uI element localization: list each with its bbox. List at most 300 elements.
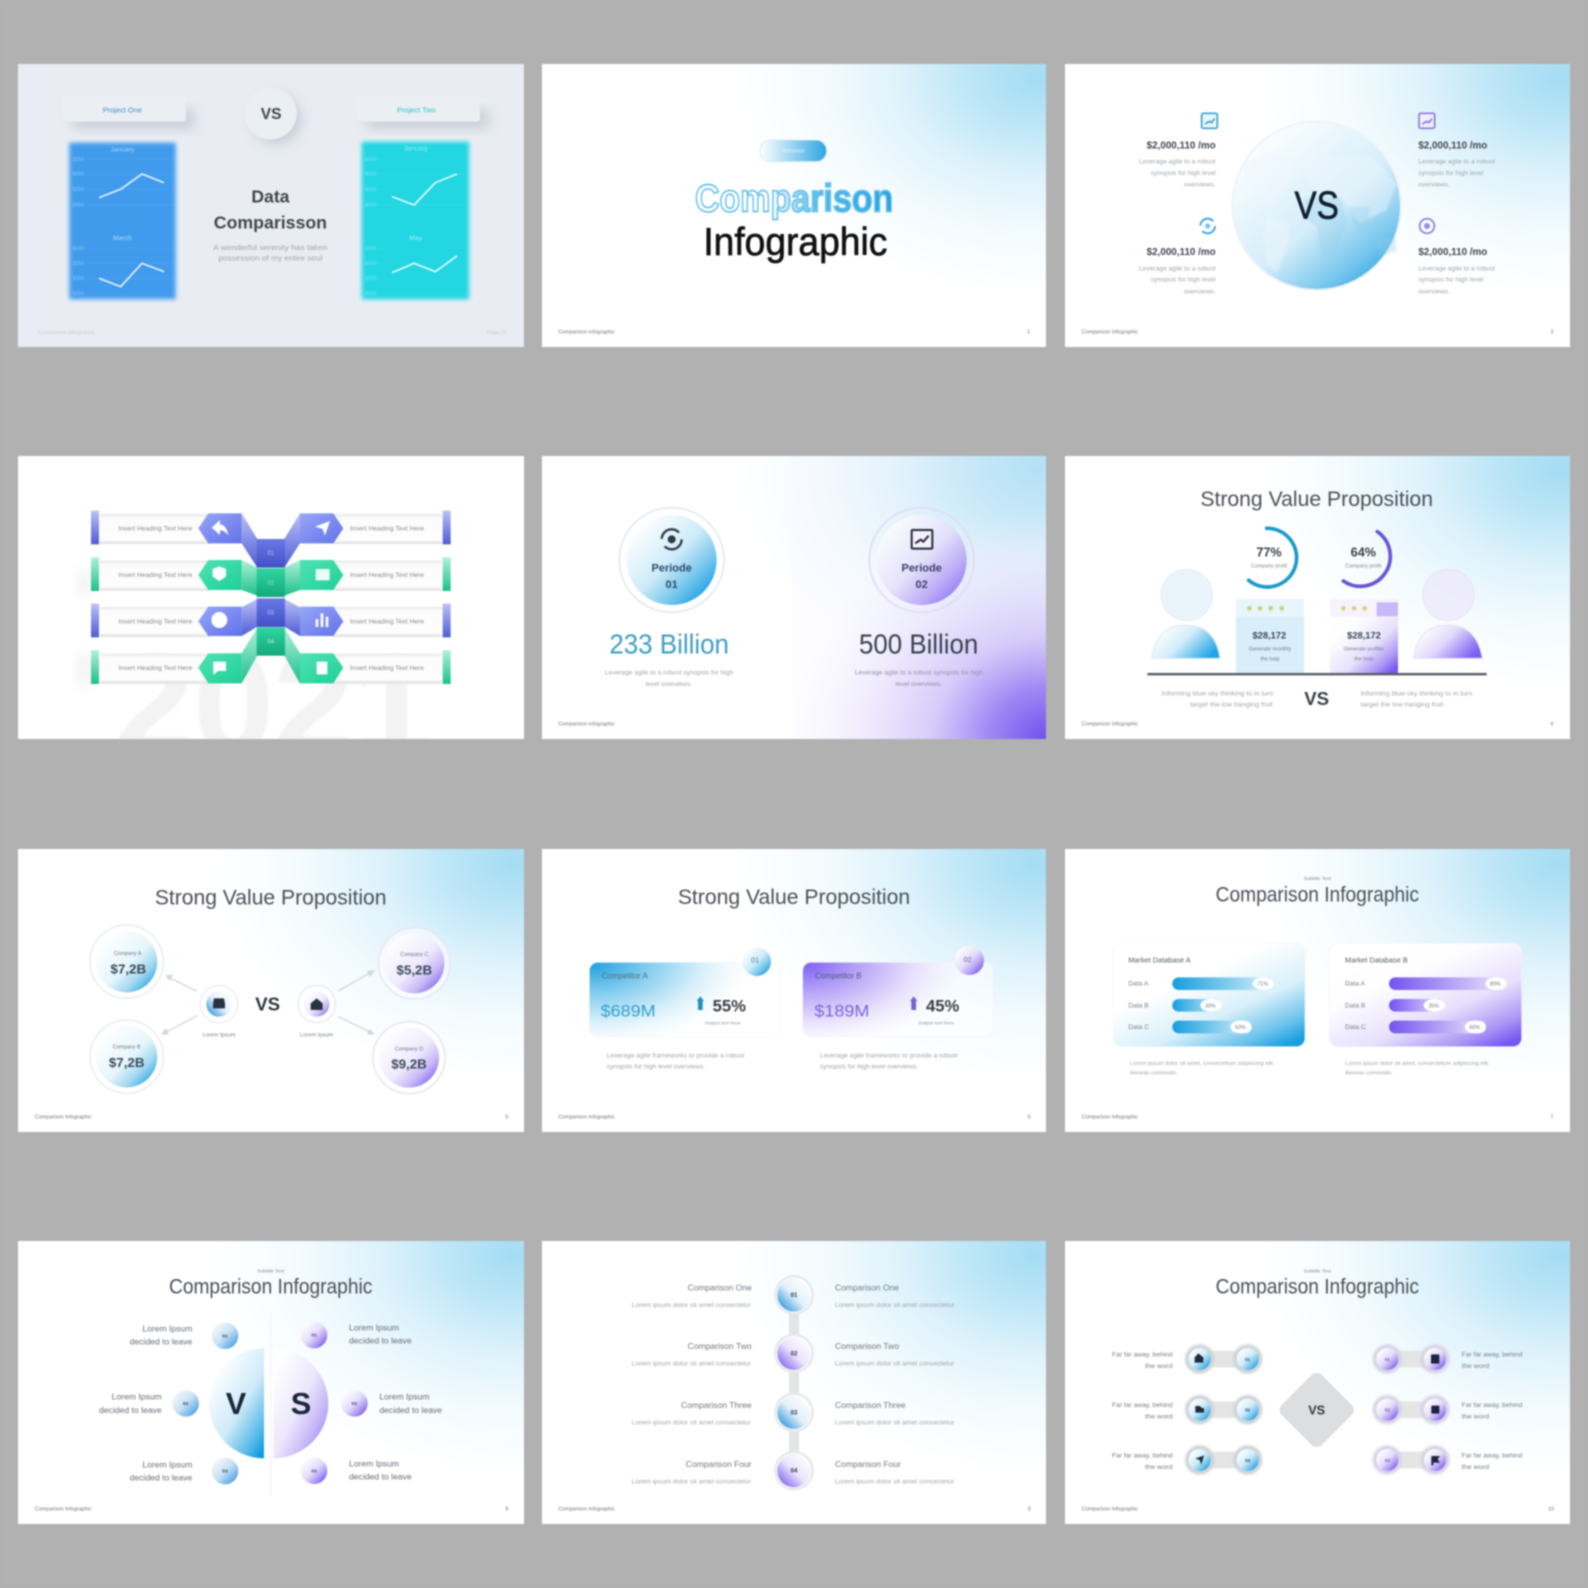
- watermark: 2021: 2021: [114, 624, 433, 784]
- footer: Comparison Infographic: [558, 722, 615, 728]
- person: left: [1152, 569, 1220, 658]
- badge: 01: [742, 947, 771, 976]
- description right: Leverage agile to a robust synopsis for high: [855, 670, 984, 677]
- row panels: [100, 514, 442, 684]
- ring: 77 percent: Company profit: [1251, 563, 1288, 569]
- vs: VS: [255, 994, 280, 1015]
- footer: [558, 1114, 1031, 1120]
- description left: [605, 670, 734, 688]
- chart panel: project two: $000: [365, 276, 376, 282]
- chart panel: project two: May: [409, 235, 423, 242]
- ring: 64 percent: Company profit: [1345, 563, 1382, 569]
- heading: data comparisson: [214, 187, 327, 232]
- slide 3: globe vs: [1065, 64, 1570, 347]
- half circle: v: [209, 1348, 264, 1458]
- footer: Comparison Infographic: [35, 1114, 92, 1120]
- chart panel: project one: $000: [73, 172, 84, 178]
- line chart: january: [99, 174, 164, 198]
- stat: top left: $2,000,110 /mo: [1147, 140, 1216, 151]
- bar: data b: 35%: [1428, 1003, 1439, 1009]
- badge: 01: 01: [751, 955, 759, 964]
- circle: company d: Company D: [395, 1046, 423, 1052]
- chart panel: project two: $000: [365, 203, 376, 209]
- labels right: Lorem Ipsum: [349, 1324, 399, 1333]
- labels right: Far far away, behind: [1462, 1403, 1522, 1409]
- stat: bottom right: [1418, 247, 1495, 295]
- caption right: Informing blue-sky thinking to in turn: [1361, 690, 1473, 697]
- row labels: Insert Heading Text Here: [350, 526, 424, 533]
- title: Strong Value Proposition: [155, 885, 386, 909]
- badges left: 03: [222, 1469, 228, 1475]
- icon: chart left: [1202, 113, 1217, 128]
- footer: [1082, 1506, 1554, 1512]
- footer: Comparison Infographic: [35, 1506, 92, 1512]
- labels right: Far far away, behind: [1462, 1352, 1522, 1358]
- card: database b: Data B: [1345, 1002, 1366, 1009]
- subtitle: Subtitle Text: [1304, 876, 1331, 882]
- chart panel: project one: $000: [73, 246, 84, 252]
- title: Comparison Infographic: [169, 1275, 373, 1299]
- caption left: Informing blue-sky thinking to in turn: [1162, 690, 1274, 697]
- labels left: the word: [1145, 1465, 1173, 1471]
- circle: periode 01: Periode: [652, 562, 692, 574]
- labels left: the word: [1145, 1415, 1173, 1421]
- chart panel: project two: $000: [365, 172, 376, 178]
- chart panel: project two: $000: [365, 246, 376, 252]
- slide 10: v and s: [18, 1241, 524, 1524]
- circle: periode 02: Periode: [902, 562, 942, 574]
- icon: line chart: [912, 530, 932, 549]
- card: competitor b: $189M: [814, 1002, 869, 1021]
- baseline: [1147, 673, 1487, 675]
- card: database b: [1329, 943, 1522, 1047]
- labels right: [1462, 1352, 1522, 1471]
- slide 6: people comparison: [1065, 456, 1570, 739]
- description left: Leverage agile to a robust synopsis for high: [605, 670, 734, 677]
- price card: right: the loop: [1355, 656, 1374, 662]
- stat: top right: synopsis for high level: [1418, 170, 1484, 177]
- bar: data a: [1389, 977, 1507, 990]
- icon: chart right: [1419, 113, 1435, 128]
- person: right: [1413, 569, 1482, 658]
- circle: company b: Company B: [113, 1044, 141, 1050]
- labels left: Far far away, behind: [1112, 1352, 1173, 1358]
- labels left: Lorem ipsum dolor sit amet consectetur: [632, 1303, 751, 1309]
- line chart: may: [392, 256, 457, 273]
- stat: top right: overviews.: [1418, 182, 1450, 189]
- slide 9: market database: [1065, 849, 1570, 1132]
- card: database b: Market Database B: [1345, 955, 1408, 964]
- circle: periode 02: [869, 508, 974, 612]
- description left: [607, 1052, 745, 1071]
- price card: left: Generate monthly: [1249, 647, 1292, 653]
- dumbbell row 2 left: 02: [1245, 1408, 1251, 1413]
- labels left: Lorem Ipsum: [112, 1393, 162, 1402]
- dumbbell row 1 left: 01: [1245, 1357, 1251, 1362]
- chart panel: project two: $000: [365, 261, 376, 267]
- chart panel: project two: $000: [365, 157, 376, 163]
- stat: top left: overviews.: [1184, 182, 1216, 189]
- chart panel: project two: $000: [365, 291, 376, 297]
- node 04: [775, 1452, 813, 1489]
- footer: 1: [1027, 329, 1030, 335]
- description: A wonderful serenity has taken: [213, 243, 328, 252]
- labels right: Comparison Four: [835, 1459, 901, 1469]
- circle: company c: [379, 928, 450, 999]
- chart panel: project two: January: [404, 146, 428, 153]
- title: comparison infographic: [695, 177, 893, 264]
- card: database a: [1113, 943, 1305, 1047]
- tab: project one: [63, 95, 194, 128]
- description right: [855, 670, 984, 688]
- slide 4: folded ribbon list: [17, 455, 525, 740]
- bar: data a: 71%: [1257, 982, 1268, 988]
- arrows: [163, 971, 373, 1034]
- labels left: decided to leave: [130, 1338, 193, 1347]
- icon: refresh coin: [662, 529, 682, 549]
- badge: 02: [955, 946, 984, 975]
- title: Comparison Infographic: [1216, 882, 1419, 906]
- card: competitor b: Output text here: [918, 1020, 954, 1026]
- dumbbell row 3 left: 03: [1245, 1458, 1251, 1463]
- badges left: [172, 1322, 238, 1484]
- title: comparison infographic: Infographic: [703, 220, 887, 264]
- value: 233 billion: 233 Billion: [609, 628, 729, 659]
- labels right: Lorem Ipsum: [379, 1393, 430, 1402]
- ring: 64 percent: [1343, 532, 1390, 586]
- card: database a: Data C: [1128, 1024, 1149, 1031]
- card: competitor b: [803, 962, 993, 1037]
- labels left: Lorem Ipsum: [142, 1460, 193, 1469]
- stat: top left: [1139, 140, 1216, 189]
- heading: data comparisson: Data: [251, 187, 290, 207]
- description left: Leverage agile frameworks to provide a robust: [607, 1052, 745, 1059]
- card: competitor a: [589, 962, 780, 1037]
- circle: company c: Company C: [400, 952, 429, 958]
- labels left: [632, 1282, 752, 1486]
- footer: 4: [1550, 722, 1553, 728]
- ribbon: row 4 green: [198, 627, 343, 683]
- node 04: 04: [791, 1469, 798, 1475]
- connector chain: [789, 1310, 799, 1457]
- node 02: 02: [791, 1352, 798, 1358]
- row labels: Insert Heading Text Here: [350, 665, 424, 672]
- stat: bottom right: overviews.: [1418, 288, 1450, 295]
- half circle: v: V: [226, 1387, 247, 1421]
- node 01: 01: [791, 1293, 798, 1299]
- footer: Comparison Infographic: [38, 330, 95, 336]
- chart panel: project one: [69, 143, 176, 299]
- stat: top right: $2,000,110 /mo: [1418, 140, 1487, 151]
- half circle: s: [273, 1348, 328, 1458]
- dumbbell row 3 right: [1373, 1445, 1450, 1475]
- circle: company d: [373, 1022, 445, 1094]
- line chart: march: [99, 263, 164, 287]
- labels left: Lorem Ipsum: [142, 1324, 193, 1333]
- row labels: Insert Heading Text Here: [350, 572, 424, 579]
- vs badge: VS: [261, 106, 281, 123]
- card: database a: Data A: [1128, 981, 1149, 988]
- description right: Aenean commodo.: [1345, 1071, 1393, 1077]
- title: Strong Value Proposition: [1200, 487, 1433, 511]
- tab: project two: Project Two: [397, 105, 436, 114]
- labels right: decided to leave: [379, 1406, 443, 1415]
- footer: Comparison Infographic: [1082, 1114, 1139, 1120]
- price card: left: [1236, 599, 1304, 673]
- labels right: Comparison One: [835, 1282, 899, 1292]
- stat: bottom left: [1139, 247, 1216, 295]
- end bars: [91, 511, 451, 684]
- tab: project one: Project One: [103, 105, 142, 114]
- bar: data b: [1172, 999, 1222, 1012]
- footer: Comparison Infographic: [558, 1114, 615, 1120]
- footer: 8: [505, 1506, 508, 1512]
- title: comparison infographic: Comparison: [695, 177, 893, 221]
- ring: 77 percent: 77%: [1256, 546, 1282, 560]
- icon: up arrow: [910, 996, 917, 1010]
- labels right: the word: [1462, 1364, 1489, 1370]
- stat: top right: [1418, 140, 1495, 189]
- chart panel: project one: $000: [73, 203, 84, 209]
- ring: 64 percent: 64%: [1351, 546, 1376, 560]
- labels left: Comparison One: [688, 1282, 752, 1292]
- labels left: the word: [1145, 1364, 1173, 1370]
- vs badge: [244, 87, 301, 144]
- labels left: Comparison Two: [688, 1341, 752, 1351]
- labels right: Lorem Ipsum: [349, 1459, 399, 1468]
- bar: data c: 60%: [1469, 1025, 1480, 1031]
- slide 2: cover: [542, 64, 1046, 347]
- labels left: Lorem ipsum dolor sit amet consectetur: [632, 1362, 751, 1368]
- stat: top left: synopsis for high level: [1151, 170, 1216, 177]
- description left: synopsis for high level overviews.: [607, 1064, 705, 1071]
- footer: [35, 1114, 508, 1120]
- labels left: Far far away, behind: [1112, 1453, 1173, 1459]
- dumbbell row 3 left: [1185, 1445, 1262, 1475]
- price card: left: the loop: [1261, 656, 1280, 662]
- labels right: Lorem ipsum dolor sit amet consectetur: [835, 1362, 954, 1368]
- row labels: Insert Heading Text Here: [118, 526, 193, 533]
- row labels: Insert Heading Text Here: [118, 619, 193, 626]
- description: possession of my entire soul: [218, 254, 323, 263]
- description left: Aenean commodo.: [1130, 1071, 1178, 1077]
- node 01: [775, 1276, 813, 1314]
- pill label: [760, 140, 827, 162]
- bar: data a: [1172, 977, 1274, 990]
- badge: 02: 02: [964, 955, 972, 964]
- chart panel: project one: January: [110, 146, 135, 153]
- subtitle: Subtitle Text: [1304, 1268, 1331, 1274]
- stat: bottom right: Leverage agile to a robust: [1418, 266, 1495, 273]
- footer: 3: [1550, 329, 1553, 335]
- bar: data c: [1172, 1021, 1252, 1033]
- dumbbell row 3 right: 03: [1385, 1458, 1390, 1463]
- labels right: Far far away, behind: [1462, 1453, 1522, 1459]
- description left: Lorem ipsum dolor sit amet, consectetuer adipiscing elit.: [1130, 1061, 1275, 1067]
- chart panel: project one: $000: [73, 291, 84, 297]
- title: Comparison Infographic: [1216, 1275, 1419, 1299]
- price card: right: [1330, 599, 1398, 673]
- slide 8: competitors: [542, 849, 1046, 1132]
- chart panel: project two: [362, 142, 469, 299]
- labels right: the word: [1462, 1415, 1489, 1421]
- pill label: Template: [782, 149, 805, 155]
- labels left: [99, 1324, 193, 1483]
- bar: data a: 80%: [1490, 982, 1501, 988]
- footer: [1082, 722, 1553, 728]
- dumbbell row 2 right: 02: [1385, 1408, 1390, 1413]
- dumbbell row 1 right: 01: [1385, 1357, 1390, 1362]
- footer: 10: [1548, 1506, 1554, 1512]
- node 03: 03: [791, 1410, 798, 1416]
- diamond: vs: [1277, 1370, 1357, 1450]
- caption right: target the low hanging fruit: [1361, 702, 1444, 709]
- labels left: Comparison Three: [681, 1400, 752, 1410]
- footer: Page 01: [487, 330, 507, 336]
- dumbbell row 2 right: [1373, 1395, 1450, 1424]
- labels right: Lorem ipsum dolor sit amet consectetur: [835, 1480, 954, 1486]
- labels right: the word: [1462, 1465, 1489, 1471]
- description right: Leverage agile frameworks to provide a robust: [820, 1052, 958, 1059]
- labels left: Lorem ipsum dolor sit amet consectetur: [632, 1480, 751, 1486]
- card: database a: Data B: [1128, 1002, 1149, 1009]
- node: left: [200, 985, 238, 1039]
- card: database b: Data A: [1345, 981, 1366, 988]
- labels right: Lorem ipsum dolor sit amet consectetur: [835, 1303, 954, 1309]
- icon: store: [213, 998, 225, 1008]
- chart panel: project one: $000: [73, 276, 84, 282]
- dumbbell row 2 left: [1185, 1395, 1262, 1424]
- bar: data c: [1389, 1021, 1486, 1033]
- dumbbell row 1 left: [1185, 1344, 1262, 1374]
- footer: Comparison Infographic: [1082, 722, 1139, 728]
- labels left: decided to leave: [130, 1474, 193, 1483]
- node 03: [775, 1394, 813, 1431]
- caption left: target the low hanging fruit: [1190, 702, 1273, 709]
- row labels: [118, 526, 424, 672]
- ribbon: row 3 blue: 03: [267, 610, 275, 616]
- footer: Comparison Infographic: [558, 329, 615, 335]
- stat: bottom left: overviews.: [1184, 288, 1216, 295]
- row labels: Insert Heading Text Here: [350, 619, 424, 626]
- description right: synopsis for high level overviews.: [820, 1064, 919, 1071]
- description: [213, 243, 328, 263]
- description right: [820, 1052, 958, 1071]
- description left: [1130, 1061, 1275, 1077]
- footer: 6: [1028, 1114, 1031, 1120]
- vs: VS: [1304, 688, 1329, 709]
- footer: 5: [505, 1114, 508, 1120]
- bar: data c: 50%: [1235, 1025, 1246, 1031]
- labels right: decided to leave: [349, 1337, 412, 1346]
- labels left: Far far away, behind: [1112, 1403, 1173, 1409]
- ribbon: row 2 green: 02: [267, 581, 275, 587]
- icon: coin right: [1420, 219, 1434, 233]
- card: competitor b: Competitor B: [815, 972, 862, 981]
- icon: home: [311, 998, 323, 1010]
- icon: up arrow: [697, 996, 704, 1010]
- circle: company b: $7,2B: [109, 1055, 145, 1070]
- description right: Lorem ipsum dolor sit amet, consectetuer adipiscing elit.: [1345, 1061, 1490, 1067]
- labels right: Comparison Three: [835, 1400, 906, 1410]
- labels right: Lorem ipsum dolor sit amet consectetur: [835, 1421, 954, 1427]
- badges left: 02: [183, 1401, 189, 1407]
- footer: Comparison Infographic: [558, 1506, 615, 1512]
- vs text: VS: [1294, 183, 1339, 227]
- slide 11: vertical chain: [542, 1241, 1046, 1524]
- stat: bottom right: synopsis for high level: [1418, 277, 1484, 284]
- title: Strong Value Proposition: [678, 885, 910, 909]
- bar: data b: [1389, 999, 1445, 1012]
- row labels: Insert Heading Text Here: [118, 572, 193, 579]
- footer: Comparison Infographic: [1082, 1506, 1139, 1512]
- card: database b: Data C: [1345, 1024, 1366, 1031]
- icons: ribbon glyphs: [211, 520, 330, 675]
- circle: company c: $5,2B: [397, 962, 432, 977]
- labels right: Comparison Two: [835, 1341, 899, 1351]
- footer: Comparison Infographic: [1082, 329, 1139, 335]
- circle: company b: [90, 1020, 163, 1093]
- node: left: Lorem Ipsum: [202, 1033, 236, 1039]
- footer: [558, 1506, 1031, 1512]
- card: competitor a: Competitor A: [602, 972, 648, 981]
- footer: [1082, 329, 1553, 335]
- chart panel: project one: $000: [73, 157, 84, 163]
- footer: [38, 330, 507, 336]
- chart panel: project one: $000: [73, 261, 84, 267]
- stat: bottom left: synopsis for high level: [1151, 277, 1216, 284]
- ring: 77 percent: [1249, 528, 1297, 587]
- ribbon: row 3 blue: [198, 598, 343, 636]
- card: competitor b: 45%: [926, 997, 960, 1016]
- footer: 7: [1550, 1114, 1553, 1120]
- labels right: [349, 1324, 443, 1481]
- badges right: [301, 1322, 368, 1484]
- footer: 9: [1028, 1506, 1031, 1512]
- tab: project two: [357, 95, 488, 128]
- caption left: [1162, 690, 1274, 709]
- card: competitor a: Output text here: [705, 1020, 741, 1026]
- chart panel: project one: March: [113, 235, 132, 242]
- circle: periode 01: 01: [666, 579, 678, 591]
- node: right: Lorem Ipsum: [300, 1033, 333, 1039]
- node 02: [775, 1335, 813, 1372]
- labels left: decided to leave: [99, 1406, 162, 1415]
- node: right: [298, 985, 335, 1039]
- footer: [558, 329, 1030, 335]
- description right: level overviews.: [896, 681, 943, 688]
- soft shadow: [78, 572, 92, 685]
- description right: [1345, 1061, 1490, 1077]
- subtitle: Subtitle Text: [257, 1268, 285, 1274]
- card: database a: Market Database A: [1128, 955, 1191, 964]
- ribbon: row 4 green: 04: [267, 640, 275, 646]
- price card: right: Generate profiter: [1344, 647, 1384, 653]
- row labels: Insert Heading Text Here: [118, 665, 193, 672]
- footer: [35, 1506, 508, 1512]
- labels left: Lorem ipsum dolor sit amet consectetur: [632, 1421, 751, 1427]
- slide 1: data comparison: [18, 64, 524, 347]
- labels right: decided to leave: [349, 1472, 412, 1481]
- labels left: Comparison Four: [686, 1459, 752, 1469]
- bar: data b: 30%: [1205, 1003, 1216, 1009]
- circle: company a: [90, 925, 163, 998]
- globe: [1232, 121, 1401, 290]
- circle: company a: $7,2B: [111, 962, 146, 977]
- circle: company d: $9,2B: [391, 1057, 427, 1072]
- dumbbell row 1 right: [1373, 1344, 1450, 1374]
- ribbon: row 1 blue: 01: [267, 551, 275, 557]
